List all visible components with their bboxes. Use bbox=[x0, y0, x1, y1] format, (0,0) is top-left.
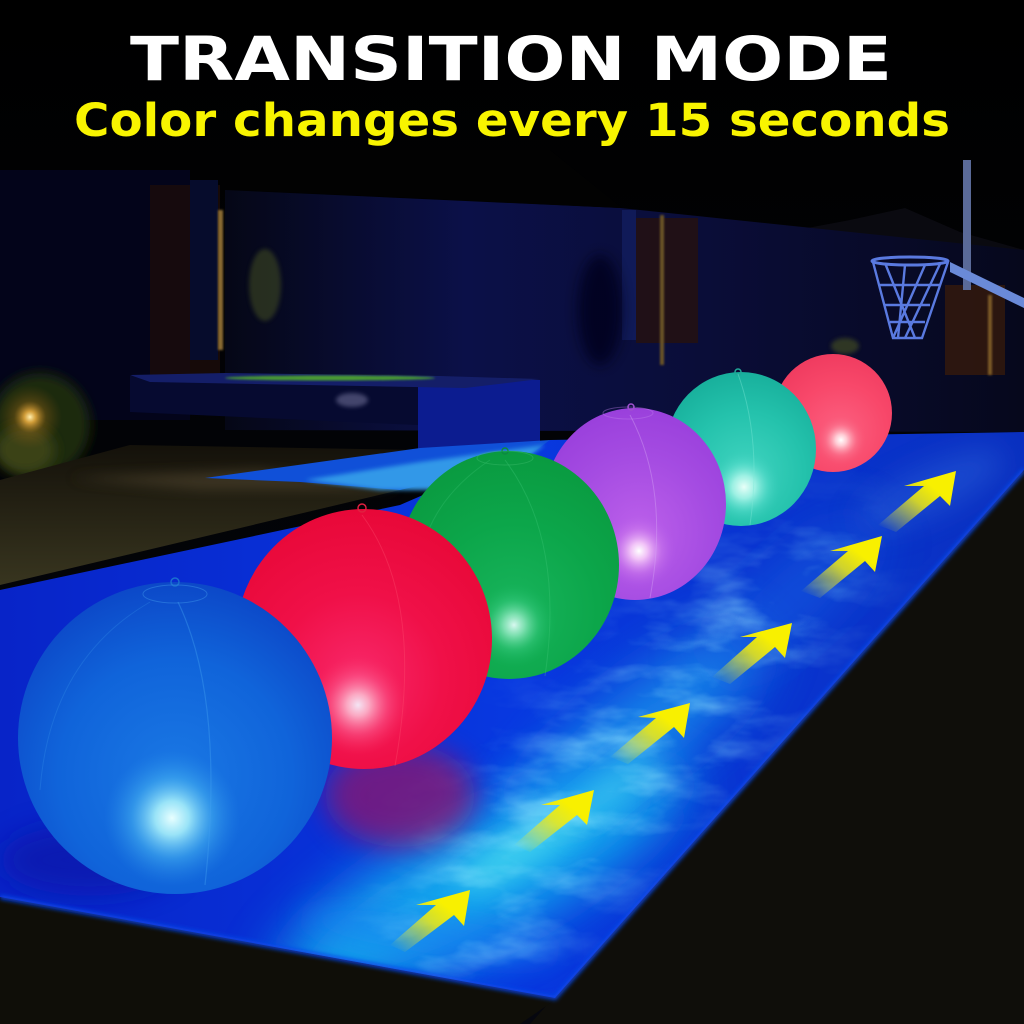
deck bbox=[0, 445, 1024, 1024]
basketball hoop bbox=[872, 160, 1024, 338]
ball: teal bbox=[666, 369, 816, 526]
direction arrows bbox=[390, 471, 956, 952]
arrow 2 bbox=[514, 790, 594, 852]
arrow 4 bbox=[712, 623, 792, 684]
ball: blue bbox=[18, 578, 332, 894]
ball: purple bbox=[544, 404, 726, 600]
swimming pool water bbox=[0, 430, 1024, 1024]
subtitle: Color changes every 15 seconds bbox=[74, 94, 950, 147]
arrow 5 bbox=[801, 536, 882, 598]
arrow 6 bbox=[878, 471, 956, 532]
raised spa bbox=[130, 373, 540, 452]
arrow 3 bbox=[610, 703, 690, 764]
ball: green bbox=[399, 448, 619, 679]
garden lamp bush bbox=[0, 373, 90, 503]
ball: red bbox=[236, 504, 492, 769]
ball: pink bbox=[774, 354, 892, 472]
arrow 1 bbox=[390, 890, 470, 952]
backyard wall bbox=[0, 150, 1024, 432]
title: TRANSITION MODE bbox=[130, 24, 892, 95]
